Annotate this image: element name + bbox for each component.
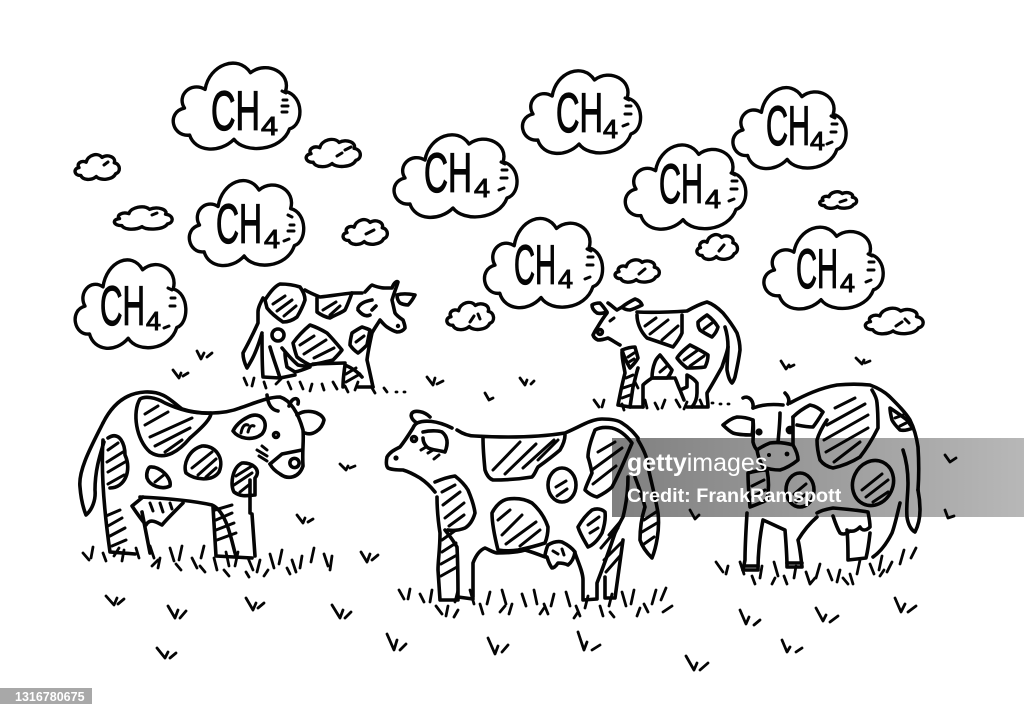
- tail: [80, 423, 104, 515]
- cloud: CH4 4: CH: [424, 141, 472, 204]
- front legs: [343, 365, 373, 387]
- ear and horn: [289, 399, 324, 434]
- cow: front right: [723, 384, 920, 570]
- watermark band: [612, 438, 1024, 517]
- cloud: CH4 2: 4: [264, 224, 280, 254]
- cloud: CH4 2: CH: [216, 192, 262, 255]
- cloud: CH4 3: CH: [100, 274, 145, 337]
- spots: [136, 397, 211, 456]
- rear leg: [687, 347, 728, 407]
- spots: [817, 390, 878, 468]
- cloud: CH4 1: CH: [211, 79, 260, 142]
- udder: [132, 497, 183, 525]
- cloud: CH4 8: 4: [558, 264, 573, 294]
- legs and belly: [437, 477, 628, 600]
- cloud: CH4 9: 4: [840, 268, 855, 298]
- cloud: CH4 5: CH: [556, 81, 603, 144]
- cloud: CH4 9: CH: [796, 237, 838, 300]
- back and rump: [637, 302, 740, 383]
- cloud: CH4 9: [764, 227, 883, 309]
- watermark: credit: Credit: FrankRamspott: [627, 485, 842, 507]
- udder: [675, 375, 697, 407]
- spots: [637, 315, 682, 347]
- spots: [265, 284, 305, 322]
- cloud: CH4 8: [484, 218, 603, 308]
- grass: scattered tufts: [106, 351, 956, 670]
- cloud: CH4 8: CH: [514, 233, 556, 296]
- spots: [293, 325, 342, 365]
- spots: [483, 435, 565, 480]
- head: [592, 299, 642, 313]
- back: [305, 290, 362, 297]
- cloud: CH4 3: 4: [146, 306, 161, 336]
- cloud: CH4 6: CH: [659, 152, 703, 215]
- grass: under cows: [83, 378, 916, 618]
- cow: front left: [80, 392, 324, 558]
- udder: [545, 542, 575, 568]
- hind legs: [262, 335, 295, 378]
- tail: [635, 440, 659, 558]
- cloud: CH4 3: [75, 260, 186, 348]
- head: [753, 404, 793, 450]
- cloud: CH4 7: [733, 88, 846, 169]
- watermark: logo: gettyimages: [627, 449, 767, 477]
- tail: [903, 450, 920, 532]
- cloud: CH4 4: [394, 135, 517, 217]
- head: [365, 282, 405, 387]
- cloud: CH4 6: 4: [705, 184, 721, 214]
- image id tag: [0, 688, 92, 704]
- legs: [743, 513, 870, 570]
- body outline: [790, 384, 919, 557]
- cloud: CH4 6: [625, 145, 746, 229]
- small puffs: [75, 139, 923, 334]
- front legs: [618, 352, 673, 407]
- cloud: CH4 5: 4: [603, 114, 618, 144]
- ear: [411, 411, 430, 423]
- udder and belly: [817, 508, 870, 534]
- eye: [423, 431, 447, 452]
- cloud: CH4 4: 4: [474, 173, 490, 203]
- cloud: CH4 5: [522, 71, 641, 153]
- cloud: CH4 1: [173, 63, 300, 149]
- cloud: CH4 7: 4: [810, 126, 825, 156]
- methane clouds: [75, 63, 883, 348]
- ears: [723, 405, 823, 435]
- cloud: CH4 2: [189, 181, 304, 266]
- horns: [743, 393, 789, 408]
- cow: back right: [592, 299, 740, 407]
- muzzle: [757, 443, 798, 470]
- muzzle: [267, 395, 302, 468]
- tail: [243, 298, 263, 368]
- udder: [282, 348, 345, 372]
- cloud: CH4 7: CH: [766, 94, 810, 157]
- image id tag: 1316780675: [15, 690, 85, 704]
- back and head outline: [386, 419, 638, 492]
- cow: back left: [243, 282, 415, 387]
- cloud: CH4 1: 4: [261, 111, 278, 141]
- cow: front middle: [386, 411, 659, 600]
